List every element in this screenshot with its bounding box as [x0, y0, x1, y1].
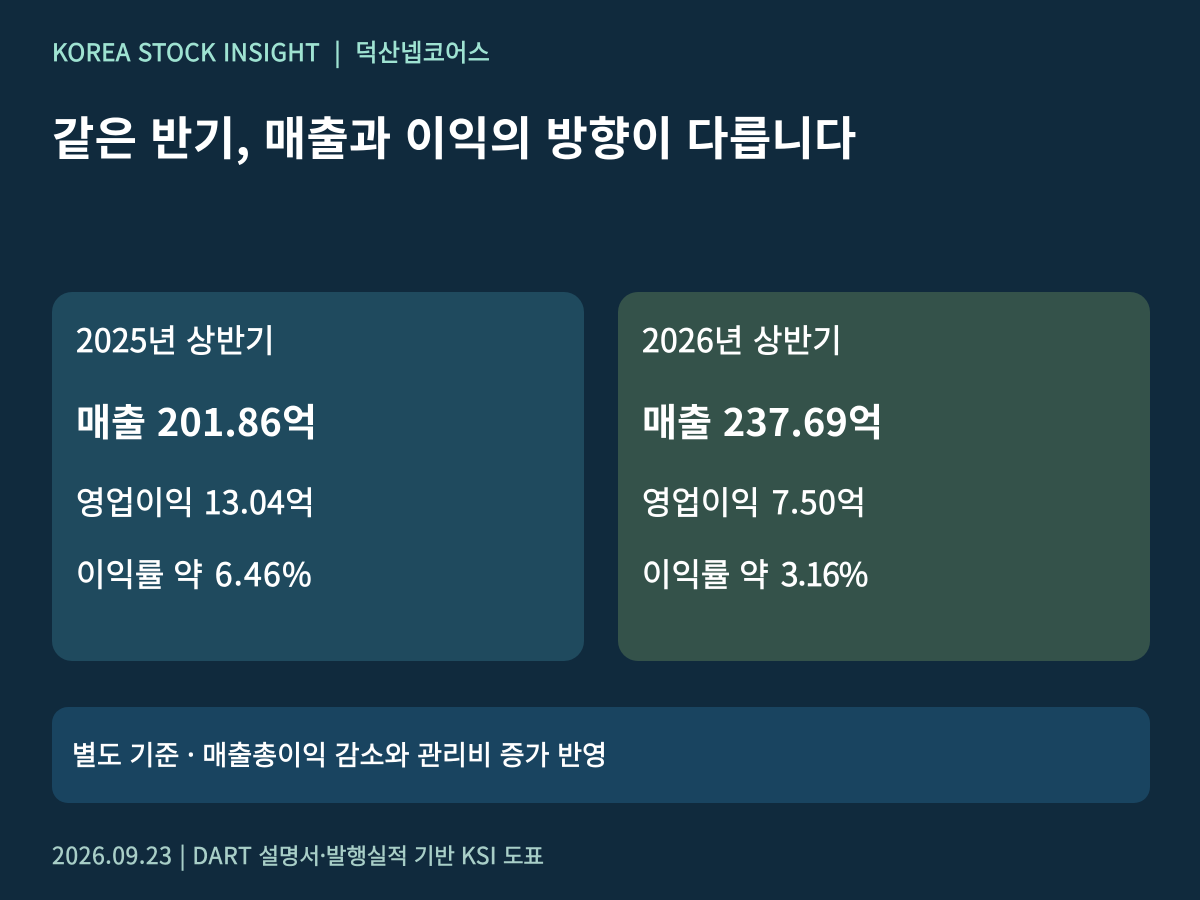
- operating profit 2025: 영업이익 13.04억: [76, 478, 315, 524]
- panel: 2026 first half: [618, 292, 1150, 661]
- footer source: 2026.09.23 | DART 설명서·발행실적 기반 KSI 도표: [52, 837, 544, 871]
- revenue 2026: 매출 237.69억: [642, 392, 883, 447]
- revenue 2025: 매출 201.86억: [76, 392, 317, 447]
- margin 2025: 이익률 약 6.46%: [76, 550, 313, 596]
- callout text: 별도 기준 · 매출총이익 감소와 관리비 증가 반영: [72, 734, 607, 773]
- callout bar: [52, 707, 1150, 803]
- panel: 2025 first half: [52, 292, 584, 661]
- period heading 2026: 2026년 상반기: [642, 316, 842, 362]
- margin 2026: 이익률 약 3.16%: [642, 550, 867, 596]
- operating profit 2026: 영업이익 7.50억: [642, 478, 866, 524]
- title: 같은 반기, 매출과 이익의 방향이 다릅니다: [52, 103, 857, 169]
- period heading 2025: 2025년 상반기: [76, 316, 275, 362]
- kicker: KOREA STOCK INSIGHT | 덕산넵코어스: [52, 33, 490, 68]
